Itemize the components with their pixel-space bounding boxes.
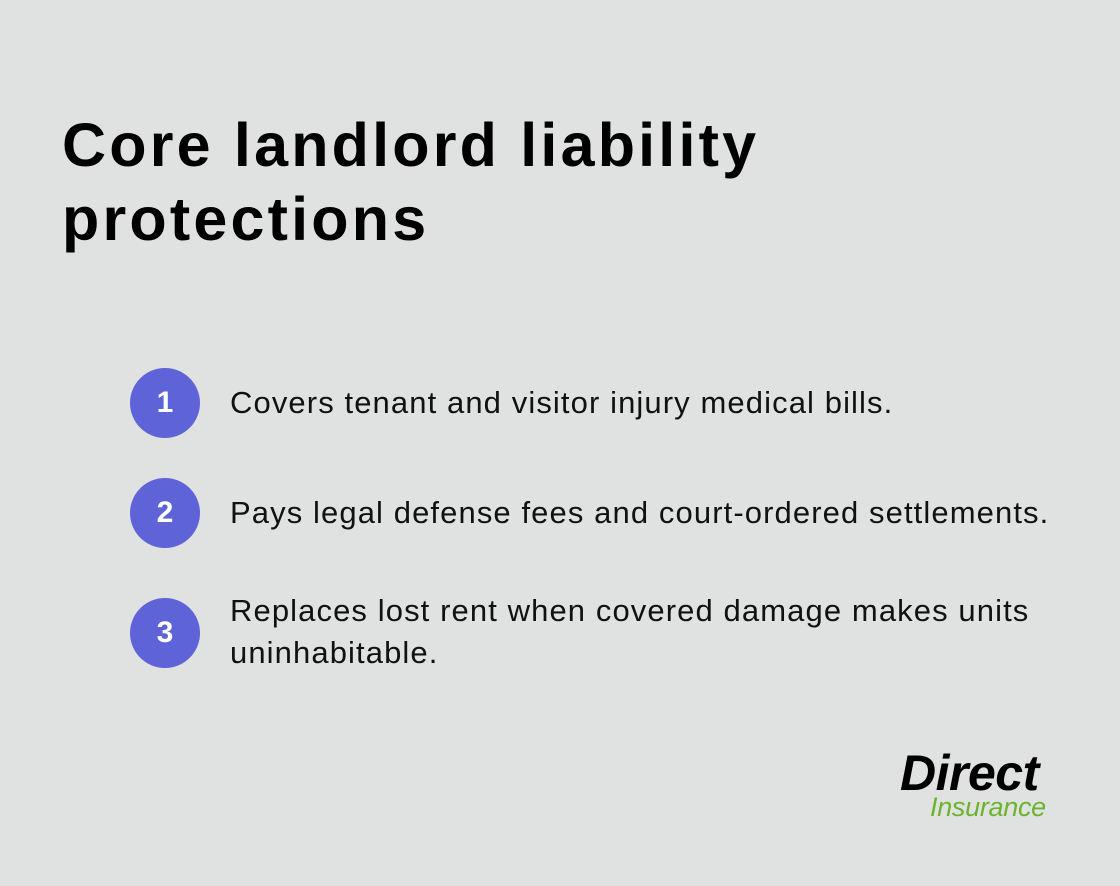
icon: number 3: 3 [157, 616, 173, 649]
logo: Insurance [930, 792, 1046, 822]
text 1: Covers tenant and visitor injury medical bills. [230, 385, 893, 420]
text 3: uninhabitable. [230, 635, 438, 670]
icon: number 2 [130, 478, 200, 548]
icon: number 1: 1 [157, 386, 173, 419]
icon: number 3 [130, 598, 200, 668]
icon: number 1 [130, 368, 200, 438]
item 1 [130, 368, 893, 438]
text 3 [230, 593, 1029, 670]
item 3 [130, 593, 1029, 670]
logo: Direct [900, 745, 1039, 801]
logo [900, 745, 1046, 822]
item 2 [130, 478, 1049, 548]
title: Core landlord liability [62, 111, 759, 179]
text 2: Pays legal defense fees and court-ordered settlements. [230, 495, 1049, 530]
title [62, 111, 759, 253]
icon: number 2: 2 [157, 496, 173, 529]
text 3: Replaces lost rent when covered damage makes units [230, 593, 1029, 628]
title: protections [62, 185, 429, 253]
